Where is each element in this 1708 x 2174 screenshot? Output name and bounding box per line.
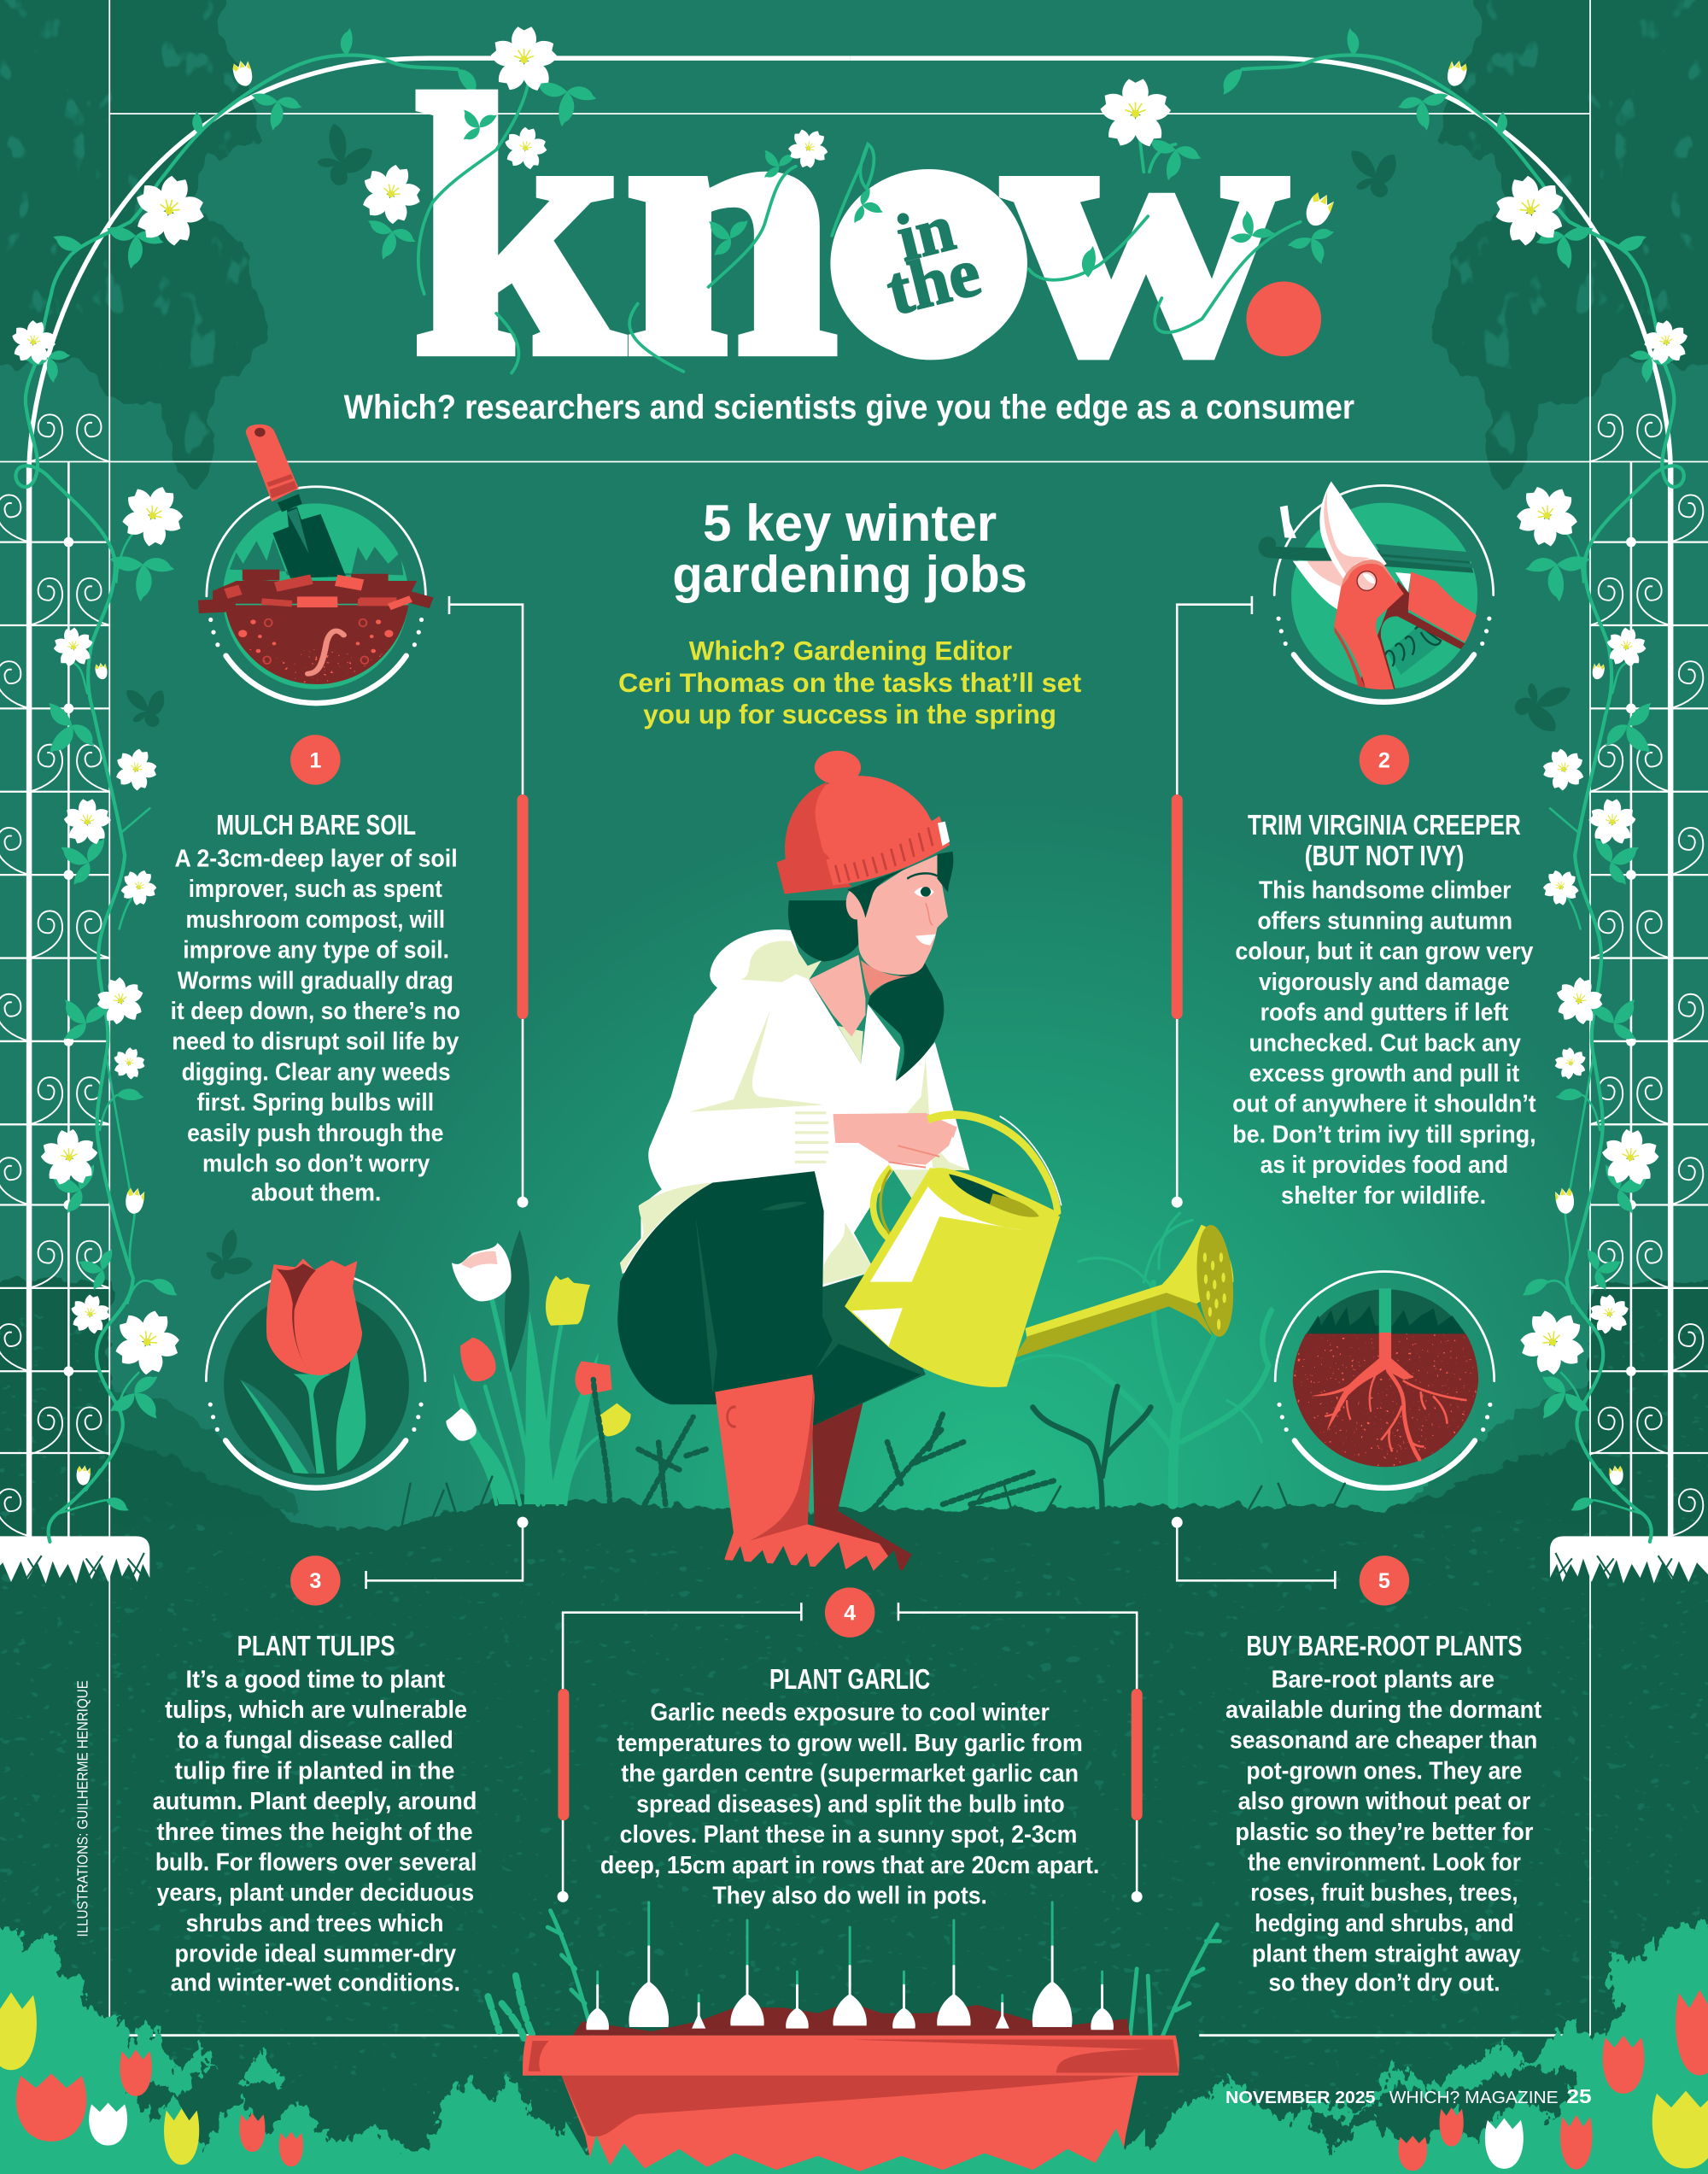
body text 5: buy bare-root plants: so they don’t dry out. [1268, 1970, 1500, 1997]
thigh [617, 1171, 824, 1404]
sapling and bare shrub [1012, 1213, 1272, 1511]
body text 2: trim virginia creeper: offers stunning autumn [1257, 907, 1512, 935]
hoodie [620, 929, 969, 1287]
body text 4: plant garlic: Garlic needs exposure to cool winter [650, 1699, 1050, 1726]
body text 1: mulch bare soil: need to disrupt soil life by [172, 1028, 459, 1056]
body text 1: mulch bare soil: Worms will gradually drag [178, 967, 453, 994]
heading: 5 key winter gardening jobs: gardening jobs [672, 546, 1027, 603]
icon 3: tulip [206, 1258, 425, 1488]
icon 2: secateurs [1259, 481, 1494, 702]
body text 4: plant garlic: temperatures to grow well. Buy garlic from [617, 1730, 1083, 1757]
number badges [290, 735, 1409, 1638]
body text 3: plant tulips: bulb. For flowers over several [155, 1849, 477, 1877]
body text 4: plant garlic: the garden centre (supermarket garlic can [621, 1761, 1079, 1788]
body text 1: mulch bare soil: A 2-3cm-deep layer of soil [175, 845, 458, 872]
body text 4: plant garlic: They also do well in pots. [712, 1883, 987, 1909]
hand [833, 1113, 956, 1164]
body text 2: trim virginia creeper: (BUT NOT IVY) [1305, 841, 1464, 872]
number badges: 2 [1378, 748, 1390, 772]
body text 2: trim virginia creeper: unchecked. Cut back any [1249, 1029, 1521, 1057]
body text 1: mulch bare soil: digging. Clear any weeds [182, 1058, 451, 1086]
body text 5: buy bare-root plants: also grown without peat or [1238, 1788, 1530, 1815]
dark plants by ground [402, 1380, 1345, 1525]
body text 5: buy bare-root plants: plastic so they’re better for [1235, 1819, 1533, 1846]
body text 5: buy bare-root plants: roses, fruit bushes, trees, [1250, 1879, 1518, 1907]
heading: 5 key winter gardening jobs: 5 key winter [703, 495, 997, 552]
body text 4: plant garlic: deep, 15cm apart in rows that are 20cm apart. [600, 1852, 1099, 1879]
left lattice and vine [0, 28, 850, 1584]
body text 3: plant tulips [153, 1631, 477, 1997]
connectors [366, 596, 1335, 1902]
body text 3: plant tulips: and winter-wet conditions. [171, 1970, 460, 1997]
footer: NOVEMBER 2025 [1225, 2089, 1375, 2107]
body text 3: plant tulips: tulip fire if planted in the [175, 1757, 454, 1784]
title vines and flowers [351, 26, 1346, 373]
title: in [890, 190, 962, 275]
title: the [880, 233, 987, 330]
title: k [412, 23, 625, 431]
body text 1: mulch bare soil: first. Spring bulbs will [197, 1089, 434, 1116]
body text 1: mulch bare soil: MULCH BARE SOIL [216, 810, 416, 841]
body text 2: trim virginia creeper: roofs and gutters if left [1261, 999, 1509, 1027]
right lattice and vine [850, 28, 1708, 1584]
icon 5: bare-root plant [1275, 1272, 1494, 1488]
body text 1: mulch bare soil: it deep down, so there’s no [171, 998, 460, 1025]
butterflies [115, 120, 1582, 1289]
body text 2: trim virginia creeper: as it provides food and [1261, 1151, 1508, 1179]
ground silhouette [0, 1278, 1708, 2174]
body text 5: buy bare-root plants: the environment. Look for [1248, 1849, 1521, 1877]
footer [1225, 2085, 1592, 2107]
body text 3: plant tulips: three times the height of the [156, 1819, 473, 1846]
body text 5: buy bare-root plants: seasonand are cheaper than [1230, 1727, 1537, 1755]
body text 2: trim virginia creeper: shelter for wildlife. [1281, 1182, 1486, 1210]
watering can [845, 1115, 1237, 1387]
body text 5: buy bare-root plants [1225, 1631, 1542, 1997]
body text 1: mulch bare soil: easily push through the [187, 1120, 443, 1147]
title: o [849, 23, 1015, 431]
body text 3: plant tulips: tulips, which are vulnerable [165, 1696, 467, 1724]
body text 3: plant tulips: provide ideal summer-dry [175, 1941, 456, 1968]
body text 1: mulch bare soil: improve any type of soil. [183, 937, 449, 964]
footer: WHICH? MAGAZINE [1389, 2089, 1559, 2107]
body text 2: trim virginia creeper: vigorously and damage [1259, 969, 1510, 996]
foliage: dark tree silhouettes right [1434, 0, 1708, 488]
body text 5: buy bare-root plants: available during the dormant [1225, 1696, 1542, 1724]
body text 5: buy bare-root plants: hedging and shrubs, and [1255, 1910, 1514, 1937]
hair back [788, 900, 944, 1081]
garden tulips bottom [0, 1989, 1708, 2171]
body text 1: mulch bare soil: mushroom compost, will [186, 906, 445, 934]
body text 4: plant garlic: spread diseases) and split the bulb into [636, 1790, 1065, 1818]
byline: Which? Gardening Editor [689, 636, 1012, 666]
body text 2: trim virginia creeper: colour, but it can grow very [1235, 938, 1534, 965]
body text 2: trim virginia creeper: excess growth and pull it [1249, 1060, 1520, 1087]
boot front [715, 1374, 900, 1573]
body text 5: buy bare-root plants: BUY BARE-ROOT PLANTS [1246, 1631, 1522, 1662]
body text 2: trim virginia creeper: be. Don’t trim ivy till spring, [1232, 1121, 1536, 1148]
neck [809, 955, 865, 1037]
pants back leg [812, 1271, 926, 1427]
title [412, 23, 1321, 431]
byline [618, 636, 1082, 730]
number badges: 3 [309, 1569, 321, 1593]
body text 3: plant tulips: to a fungal disease called [178, 1727, 453, 1755]
body text 3: plant tulips: It’s a good time to plant [186, 1666, 446, 1693]
body text 4: plant garlic: cloves. Plant these in a sunny spot, 2-3cm [620, 1821, 1077, 1849]
number badges: 4 [844, 1602, 856, 1626]
title: n [624, 23, 838, 431]
body text 5: buy bare-root plants: pot-grown ones. They are [1246, 1757, 1522, 1784]
body text 1: mulch bare soil: about them. [251, 1180, 381, 1207]
tulip group [446, 1230, 631, 1504]
body text 5: buy bare-root plants: plant them straight away [1252, 1941, 1521, 1968]
byline: Ceri Thomas on the tasks that’ll set [618, 667, 1082, 698]
body text 2: trim virginia creeper [1232, 810, 1536, 1210]
subtitle: Which? researchers and scientists give you the edge as a consumer [344, 389, 1354, 426]
byline: you up for success in the spring [643, 699, 1056, 730]
body text 3: plant tulips: shrubs and trees which [186, 1910, 443, 1937]
number badges: 1 [309, 748, 321, 772]
hat [815, 751, 861, 784]
body text 4: plant garlic [600, 1664, 1099, 1909]
face [857, 854, 948, 975]
title: w [1003, 23, 1286, 431]
body text 3: plant tulips: PLANT TULIPS [237, 1631, 395, 1662]
garlic pot [523, 1902, 1179, 2174]
foliage: dark tree silhouettes left [0, 0, 266, 488]
body text 1: mulch bare soil [171, 810, 460, 1207]
grass over boots [714, 1542, 922, 1587]
body text 2: trim virginia creeper: This handsome climber [1259, 877, 1511, 905]
hoodie shadows [620, 941, 969, 1285]
body text 1: mulch bare soil: mulch so don’t worry [202, 1151, 430, 1178]
body text 3: plant tulips: years, plant under deciduous [156, 1879, 474, 1907]
heading: 5 key winter gardening jobs [672, 495, 1027, 603]
body text 4: plant garlic: PLANT GARLIC [769, 1664, 930, 1696]
boot back [812, 1402, 912, 1571]
icon 1: trowel in mulch [198, 425, 434, 703]
body text 3: plant tulips: autumn. Plant deeply, around [153, 1788, 477, 1815]
credit: ILLUSTRATIONS: GUILHERME HENRIQUE [73, 1680, 91, 1937]
hair front [847, 852, 953, 918]
gardener [617, 751, 1237, 1573]
body text 2: trim virginia creeper: out of anywhere it shouldn’t [1232, 1091, 1536, 1118]
body text 2: trim virginia creeper: TRIM VIRGINIA CREEPER [1248, 810, 1521, 841]
bottom foliage [0, 1911, 1708, 2174]
body text 1: mulch bare soil: improver, such as spent [189, 876, 442, 903]
footer: 25 [1566, 2085, 1592, 2107]
body text 5: buy bare-root plants: Bare-root plants are [1272, 1666, 1494, 1693]
number badges: 5 [1378, 1569, 1390, 1593]
